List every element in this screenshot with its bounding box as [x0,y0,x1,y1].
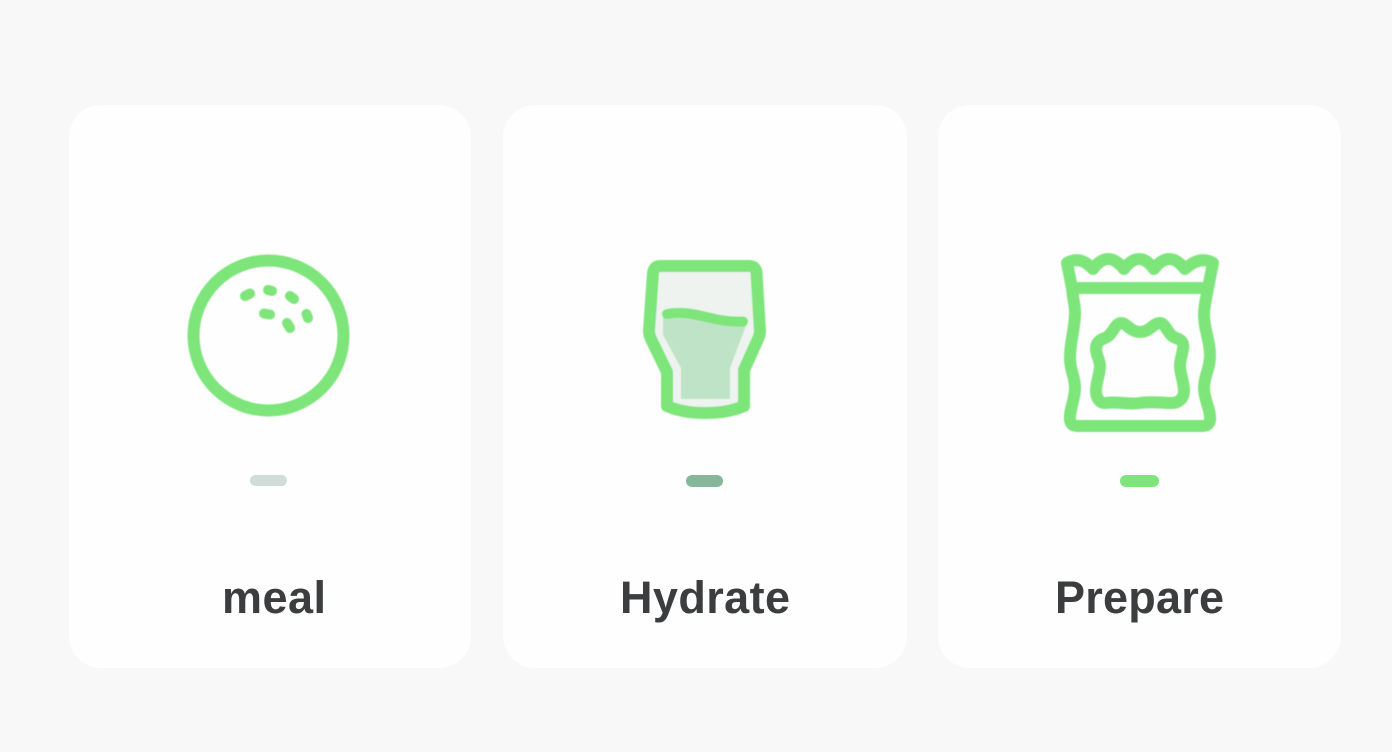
label: Prepare: Prepare [1055,572,1224,623]
icon: food pouch [1067,259,1213,426]
icon: glass of water [649,266,760,413]
indicator: medium pill [686,475,723,487]
indicator: light pill [250,475,287,486]
indicator: bright pill [1120,475,1159,487]
label: meal: meal [222,572,326,623]
panel: hydrate [503,105,907,668]
label: Hydrate: Hydrate [620,572,790,623]
icon: rice ball [194,260,344,410]
panel: meal [69,105,471,668]
panel: prepare [938,105,1341,668]
